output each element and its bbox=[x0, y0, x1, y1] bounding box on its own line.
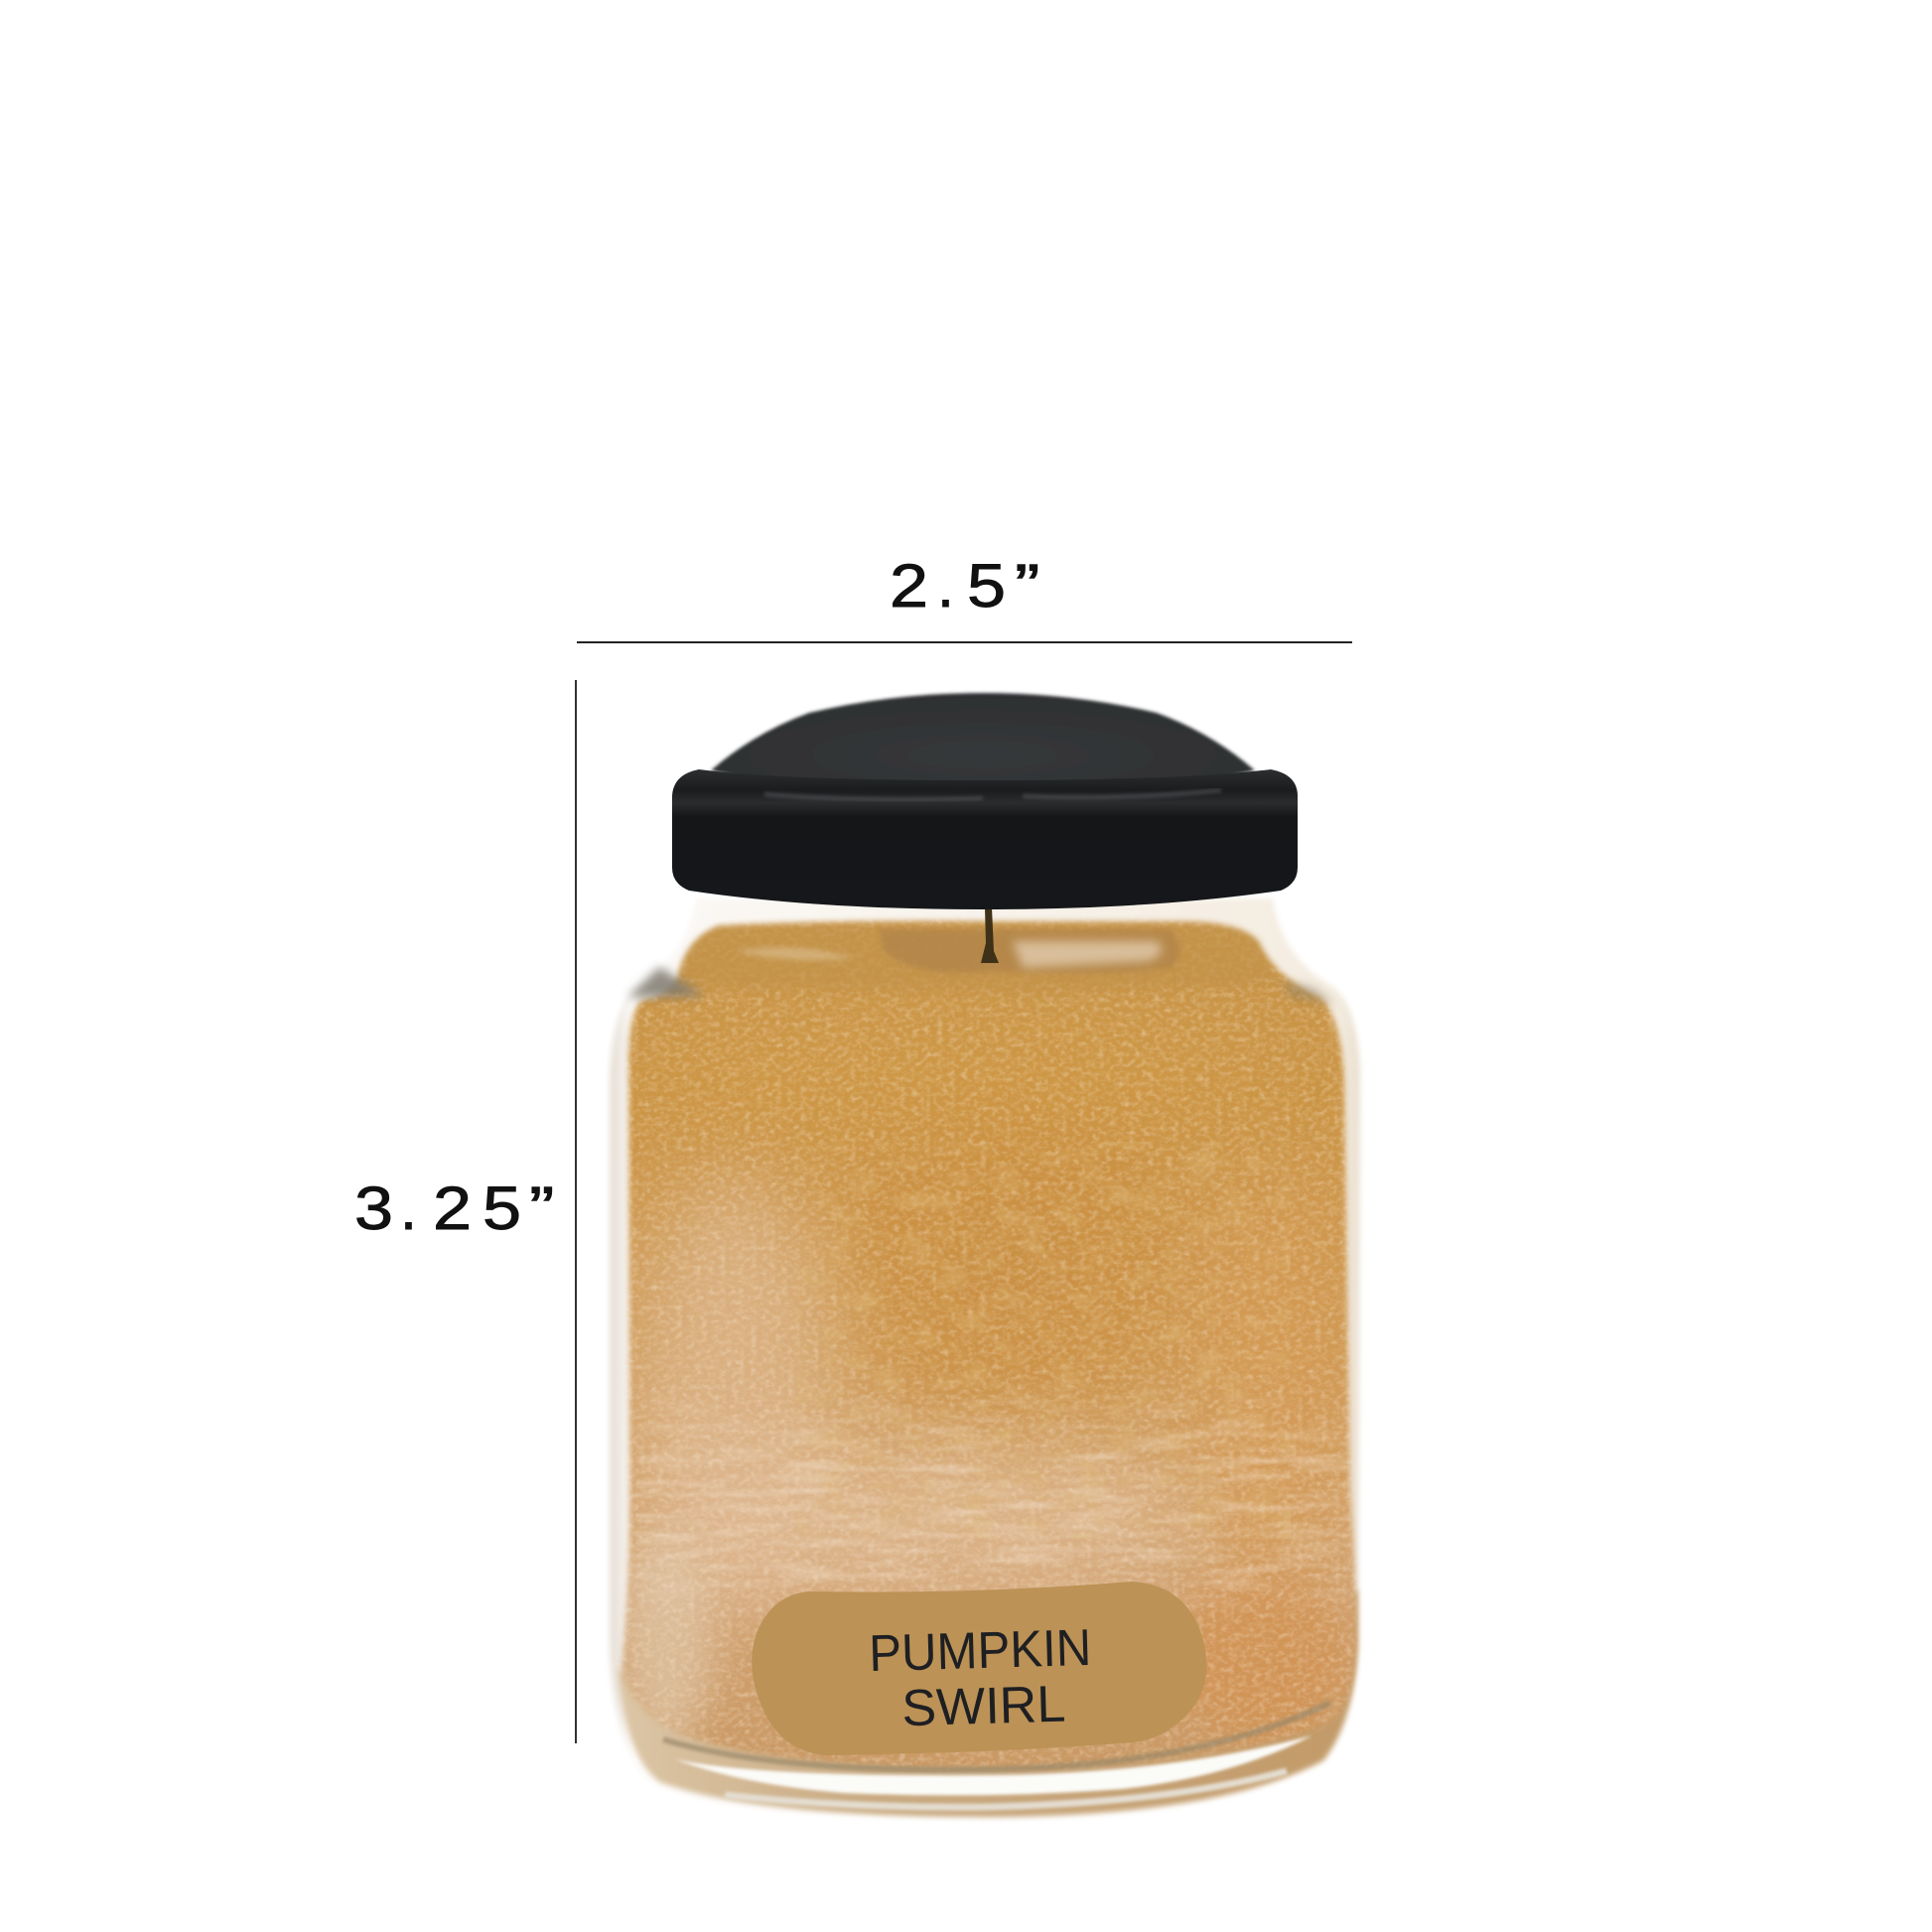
dimension: width label 2.5 inches: ” bbox=[1015, 551, 1039, 620]
glass jar body bbox=[610, 898, 1360, 1817]
lid bbox=[672, 693, 1298, 909]
dimension: height label 3.25 inches: ” bbox=[529, 1173, 554, 1242]
dimension: width label 2.5 inches: 2 bbox=[890, 551, 928, 620]
dimension: height label 3.25 inches: 2 bbox=[433, 1173, 472, 1242]
candle jar bbox=[596, 693, 1390, 1817]
dimension: width label 2.5 inches bbox=[890, 551, 1039, 620]
dimension: width label 2.5 inches: 5 bbox=[967, 551, 1006, 620]
melt pool highlight bbox=[879, 929, 1179, 973]
infographic: candle jar with dimensions bbox=[356, 564, 1362, 1821]
wax grain bbox=[596, 913, 1390, 1787]
lid dome bbox=[711, 693, 1255, 796]
jar shoulder shadow right bbox=[1281, 981, 1336, 1005]
glass base highlights bbox=[663, 1703, 1330, 1807]
wick bbox=[981, 907, 999, 963]
dimension: height label 3.25 inches: . bbox=[400, 1174, 417, 1242]
label text: PUMPKIN bbox=[868, 1619, 1092, 1683]
dimension line: height bbox=[575, 680, 577, 1743]
wax fill bbox=[596, 913, 1390, 1787]
dimension: width label 2.5 inches: . bbox=[937, 552, 954, 620]
lid highlight bbox=[764, 790, 1221, 799]
glass base tint bbox=[618, 1588, 1357, 1817]
wax tone patches bbox=[621, 1150, 1351, 1740]
wax neck shade bbox=[675, 923, 1271, 992]
dimension line: width bbox=[577, 641, 1352, 643]
jar shoulder shadow left bbox=[627, 967, 705, 998]
dimension: height label 3.25 inches: 5 bbox=[483, 1173, 521, 1242]
label text bbox=[868, 1619, 1094, 1738]
dimension: height label 3.25 inches bbox=[354, 1173, 554, 1242]
lid band bbox=[672, 769, 1298, 909]
dimension: height label 3.25 inches: 3 bbox=[354, 1173, 393, 1242]
label text: SWIRL bbox=[901, 1676, 1066, 1737]
product label bbox=[752, 1582, 1206, 1755]
